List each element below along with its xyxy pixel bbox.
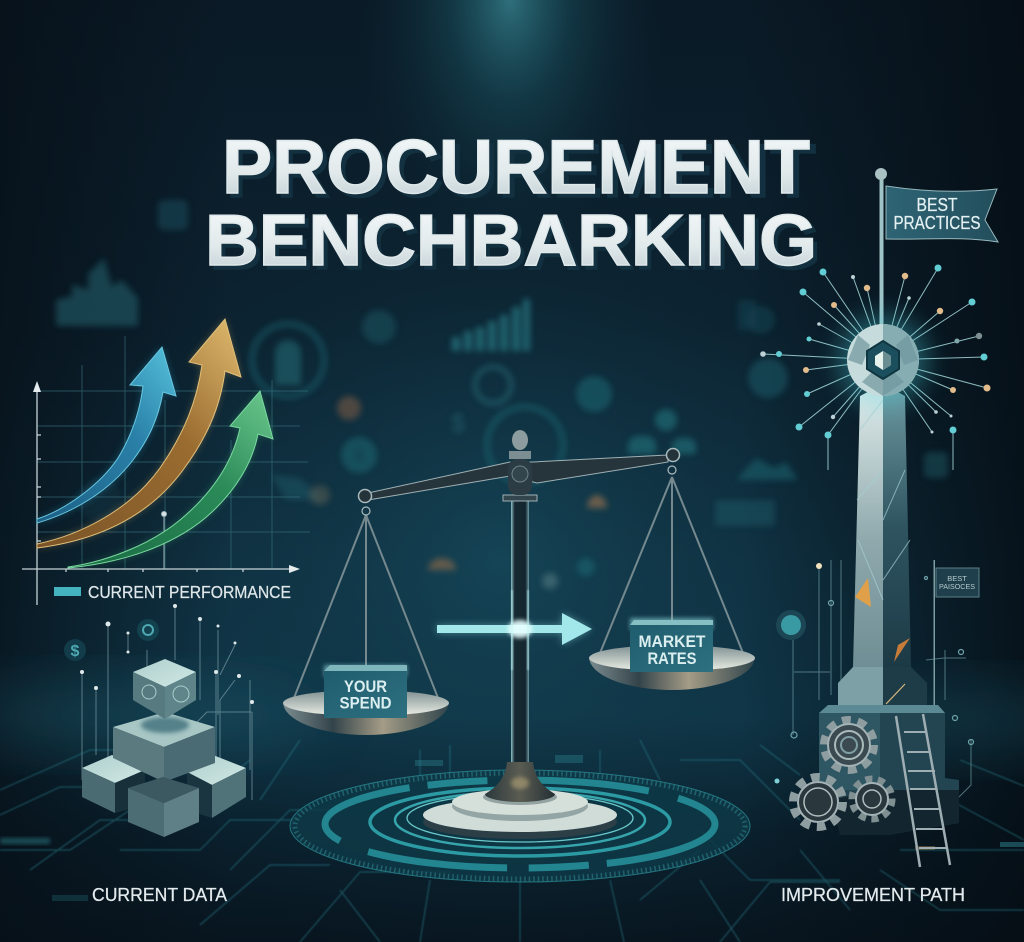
comparison arrow <box>437 590 592 670</box>
arrow: green growth <box>68 391 273 568</box>
mini flag: PAISOCES <box>939 584 975 591</box>
line chart: current performance <box>22 319 310 605</box>
cube: top <box>133 659 196 719</box>
flagpole <box>875 168 887 333</box>
burst rays <box>763 268 987 470</box>
icon: dollar coin <box>64 639 86 661</box>
flag: best practices: BEST <box>916 195 958 215</box>
arrow: blue growth <box>37 347 176 523</box>
label: market rates: RATES <box>648 650 696 668</box>
best practices monument <box>760 168 998 867</box>
label: current data: CURRENT DATA <box>92 885 227 905</box>
title: BENCHBARKING <box>209 205 821 285</box>
chart legend label: CURRENT PERFORMANCE <box>88 582 291 602</box>
cube: middle <box>113 712 215 782</box>
title <box>205 125 821 285</box>
flag: best practices <box>886 186 998 242</box>
blurred background icons: $ <box>451 408 466 438</box>
label: your spend <box>340 678 392 712</box>
data cubes <box>64 604 254 837</box>
burst nodes <box>760 264 990 438</box>
mini flag <box>934 560 979 705</box>
icon: small badge <box>776 610 806 640</box>
label: market rates: MARKET <box>638 633 706 651</box>
burst orb <box>837 314 929 406</box>
icon: coin <box>137 619 159 641</box>
title: PROCUREMENT <box>226 129 816 214</box>
platform rings <box>290 770 750 882</box>
cube: front <box>128 777 199 837</box>
icon: dollar coin: $ <box>71 643 80 660</box>
label: your spend: SPEND <box>340 694 392 712</box>
gear: upper <box>824 720 874 770</box>
title: PROCUREMENT <box>222 125 810 210</box>
scale base <box>423 762 617 839</box>
gear: lower left <box>793 777 843 827</box>
scale column <box>511 495 529 763</box>
cube: left <box>82 755 145 813</box>
blurred background icons: $ <box>354 446 364 466</box>
label: your spend: YOUR <box>344 678 387 696</box>
mini flag: BEST <box>947 574 967 583</box>
plinth <box>819 705 959 835</box>
title: BENCHBARKING <box>205 201 817 281</box>
chart axes <box>22 381 300 605</box>
scale hanging chains <box>292 477 745 703</box>
label: improvement path: IMPROVEMENT PATH <box>781 885 965 905</box>
blurred background icons <box>56 200 948 589</box>
balance scale <box>283 430 755 839</box>
ladder <box>896 714 950 867</box>
chart legend swatch <box>54 587 81 596</box>
scale beam <box>358 430 680 515</box>
chart grid <box>37 336 310 569</box>
label: market rates <box>638 633 706 668</box>
left pan: your spend <box>283 665 449 735</box>
floor circuit lines <box>0 740 1024 942</box>
gear: lower right <box>852 779 892 819</box>
obelisk collar <box>838 667 927 705</box>
obelisk <box>853 384 911 667</box>
data connector lines <box>82 606 252 800</box>
cube: right <box>187 755 246 818</box>
right pan: market rates <box>589 618 755 690</box>
side circuit lines <box>793 560 971 797</box>
flag: best practices: PRACTICES <box>894 213 980 233</box>
arrow: gold growth <box>37 319 241 548</box>
